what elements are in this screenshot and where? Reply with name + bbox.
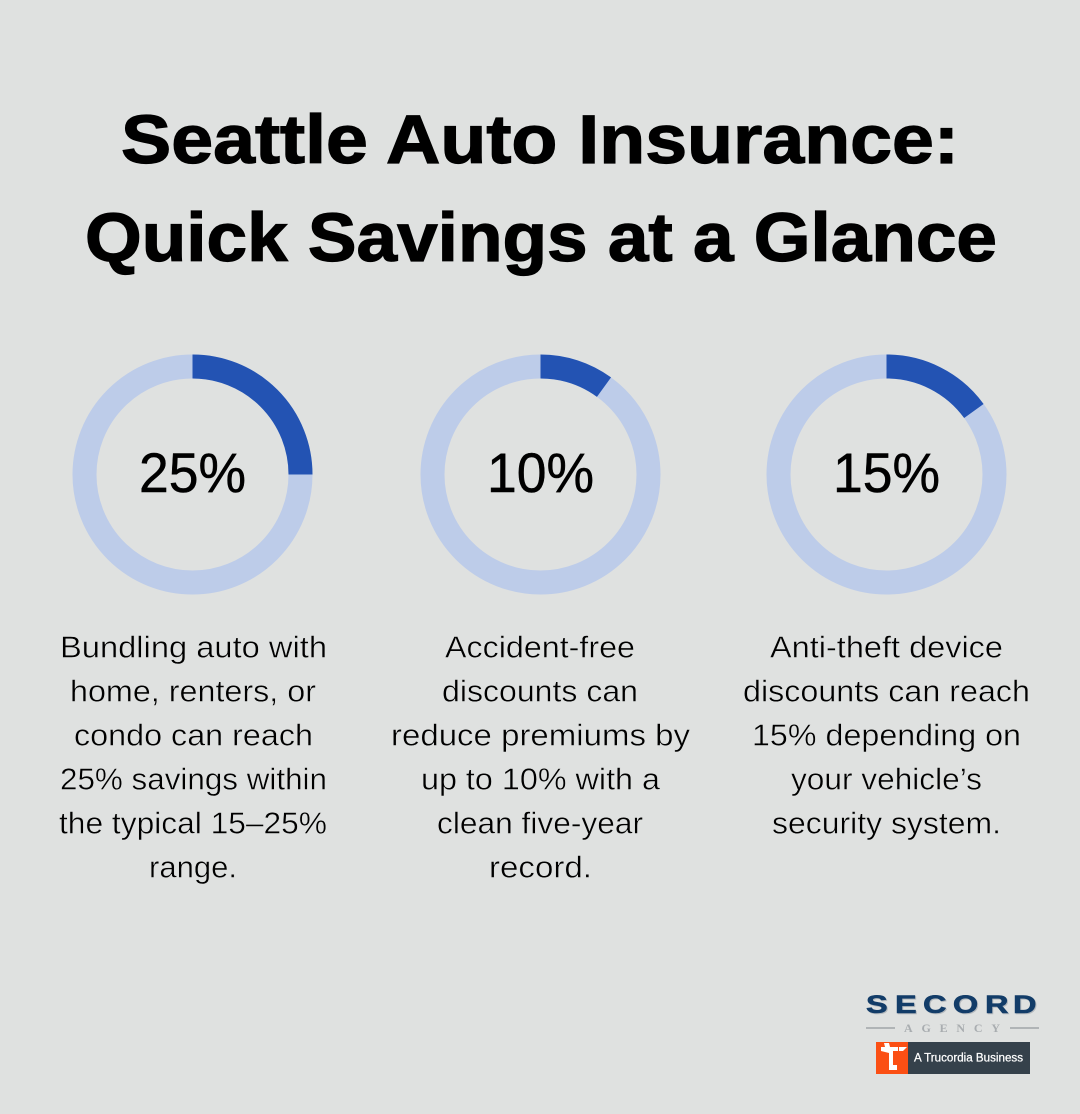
text block: anti-theft: security system. xyxy=(772,806,1001,840)
text block: accident-free: Accident-free xyxy=(445,630,635,664)
donut chart: 15% xyxy=(778,366,994,582)
text block: accident-free xyxy=(391,630,691,884)
donut chart: 10% xyxy=(432,366,648,582)
logo: A Trucordia Business xyxy=(876,1042,1030,1074)
text block: bundling xyxy=(59,630,327,884)
text block: anti-theft xyxy=(743,630,1030,840)
text block: anti-theft: your vehicle’s xyxy=(791,762,982,796)
text block: anti-theft: discounts can reach xyxy=(743,674,1030,708)
donut chart: 25%: 25% xyxy=(139,441,246,504)
logo: Secord Agency: SECORD xyxy=(867,992,1037,1020)
text block: bundling: home, renters, or xyxy=(70,674,316,708)
text block: accident-free: up to 10% with a xyxy=(421,762,660,796)
title: Quick Savings at a Glance xyxy=(85,199,997,276)
text block: accident-free: clean five-year xyxy=(437,806,643,840)
logo: Secord Agency: AGENCY xyxy=(904,1021,1000,1035)
donut chart: 25% xyxy=(84,366,300,582)
text block: bundling: range. xyxy=(149,850,237,884)
text block: bundling: Bundling auto with xyxy=(60,630,327,664)
text block: anti-theft: Anti-theft device xyxy=(770,630,1003,664)
donut chart: 10%: 10% xyxy=(487,441,594,504)
logo: Secord Agency: SECORD xyxy=(866,991,1036,1019)
title: Seattle Auto Insurance: xyxy=(121,101,959,178)
text block: bundling: the typical 15–25% xyxy=(59,806,327,840)
text block: accident-free: reduce premiums by xyxy=(391,718,691,752)
title xyxy=(85,101,997,276)
text block: bundling: 25% savings within xyxy=(60,762,327,796)
logo: A Trucordia Business: A Trucordia Business xyxy=(914,1052,1023,1064)
logo: Secord Agency xyxy=(866,991,1039,1035)
donut chart: 15%: 15% xyxy=(833,441,940,504)
text block: accident-free: discounts can xyxy=(442,674,638,708)
text block: anti-theft: 15% depending on xyxy=(752,718,1021,752)
text block: bundling: condo can reach xyxy=(74,718,313,752)
text block: accident-free: record. xyxy=(489,850,592,884)
